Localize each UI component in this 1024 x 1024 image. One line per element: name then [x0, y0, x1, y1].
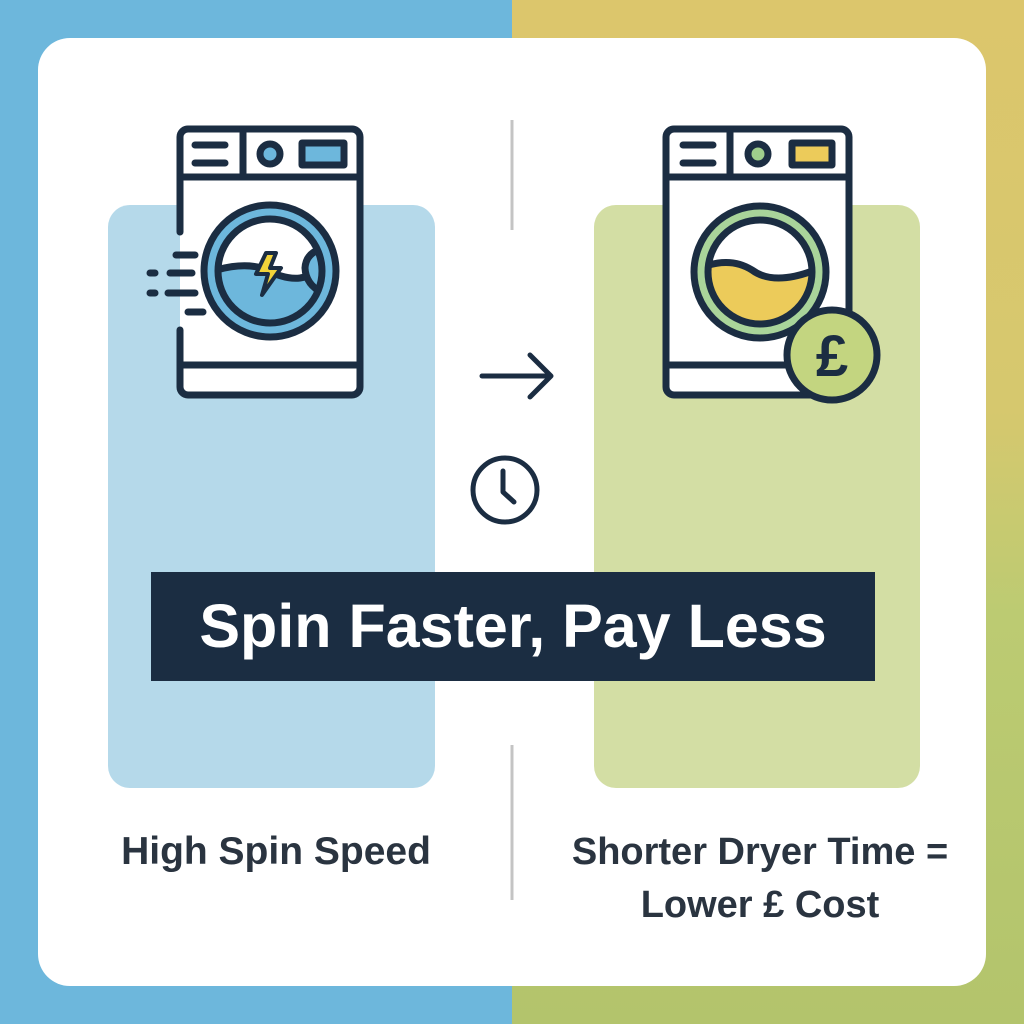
panel: right green — [594, 205, 920, 788]
label: right — [572, 831, 948, 926]
icon: right washing machine with pound coin: £ — [816, 324, 848, 389]
arrow — [480, 352, 554, 400]
label: left: High Spin Speed — [121, 830, 431, 873]
title banner: Spin Faster, Pay Less — [199, 592, 827, 660]
icon: clock — [470, 456, 540, 524]
icon: left washing machine — [146, 126, 364, 398]
icon: right washing machine with pound coin — [662, 126, 880, 404]
label: right: Shorter Dryer Time = — [572, 831, 948, 873]
title banner — [151, 572, 875, 681]
panel: left blue — [108, 205, 435, 788]
label: right: Lower £ Cost — [641, 884, 879, 926]
